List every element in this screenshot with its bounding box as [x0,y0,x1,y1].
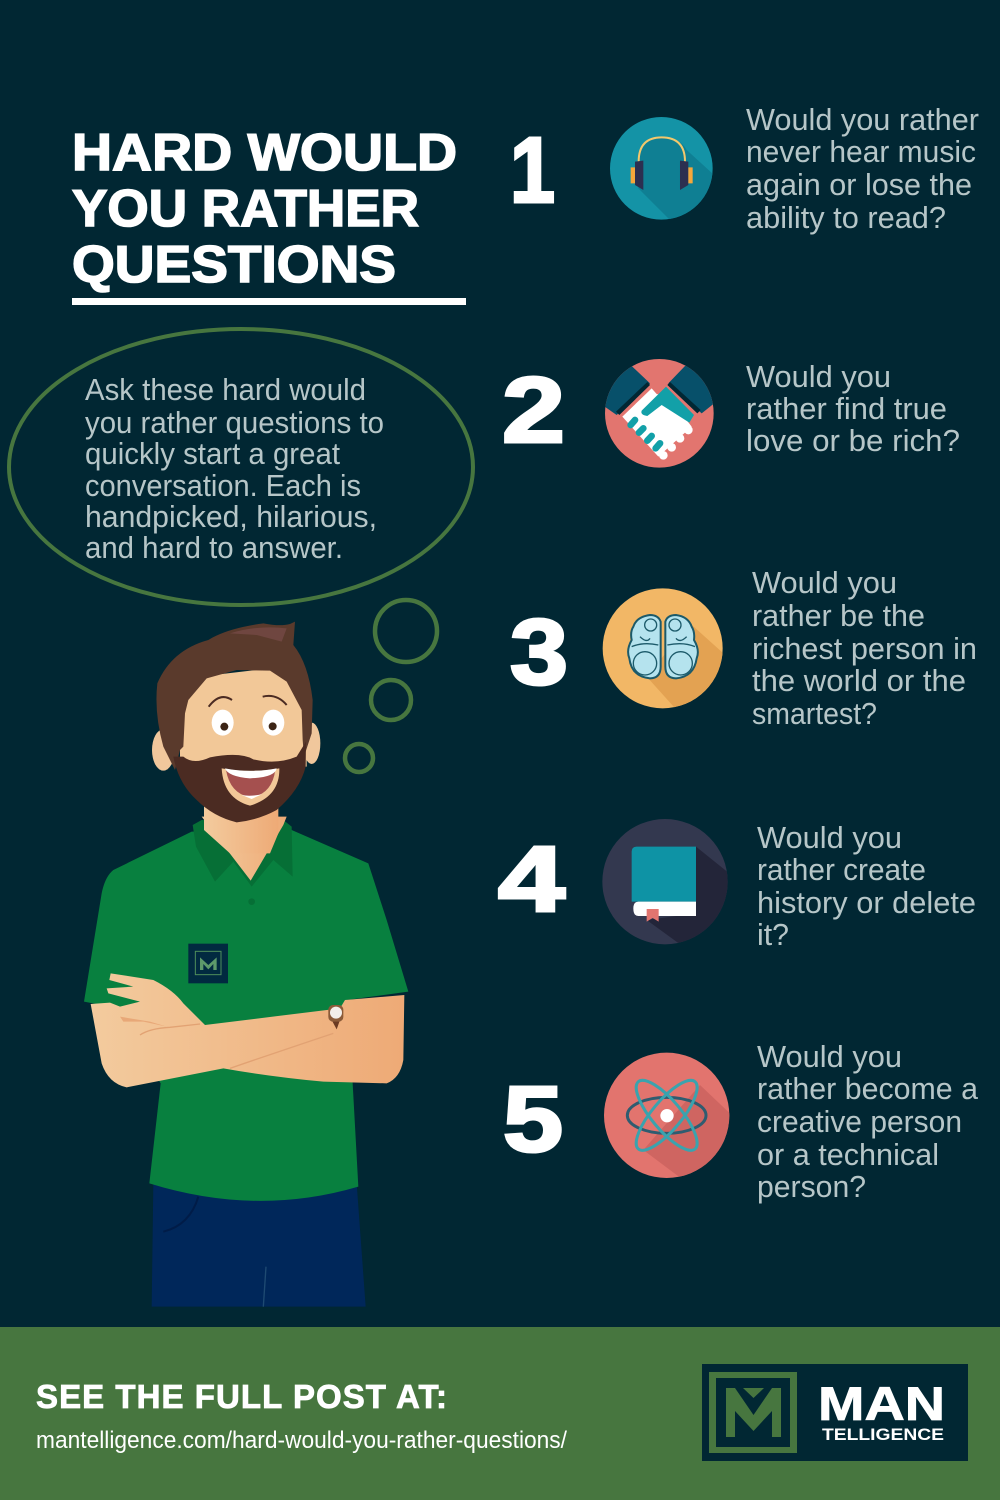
question 5: Would you [757,1039,902,1074]
trousers [152,1183,366,1307]
arms [91,973,404,1087]
icon: book [602,819,733,947]
question 1: ability to read? [746,200,946,235]
question 4: it? [757,917,789,952]
speech bubble: intro: and hard to answer. [85,530,343,565]
question 5: creative person [757,1104,962,1139]
question 5: rather become a [757,1071,979,1106]
title: QUESTIONS [72,236,396,294]
eyes [212,710,234,736]
footer heading: SEE THE FULL POST AT: [36,1378,447,1415]
question 1 [746,102,979,235]
question 2: Would you [746,359,891,394]
question 3: smartest? [752,696,877,731]
logo: MAN [818,1377,945,1430]
watch [328,1005,343,1029]
hair [156,622,313,770]
number 4: 4 [498,827,565,931]
icon: headphones [610,117,713,220]
question 4: history or delete [757,885,976,920]
question 3: rather be the [752,598,925,633]
question 3: Would you [752,565,897,600]
beard [173,742,306,822]
shirt [84,817,408,1201]
icon: atom [604,1053,733,1180]
question 5: or a technical [757,1137,939,1172]
footer banner [0,1327,1000,1500]
speech bubble: intro: handpicked, hilarious, [85,499,377,534]
speech bubble: intro: conversation. Each is [85,468,361,503]
speech bubble: intro: quickly start a great [85,436,340,471]
question 1: again or lose the [746,167,972,202]
question 2: rather find true [746,391,947,426]
title: HARD WOULD [72,124,457,182]
neck [204,807,278,853]
title: YOU RATHER [72,180,419,238]
question 3 [752,565,977,731]
icon: brain [603,588,723,710]
footer url: mantelligence.com/hard-would-you-rather-questions/ [36,1427,567,1454]
number 3: 3 [510,600,568,704]
head [152,622,320,822]
icon: handshake [600,359,718,468]
logo: TELLIGENCE [822,1425,944,1444]
question 5 [757,1039,979,1204]
question 1: never hear music [746,134,976,169]
question 5: person? [757,1169,866,1204]
question 3: richest person in [752,631,977,666]
thought bubbles [345,600,437,772]
question 3: the world or the [752,663,966,698]
mouth [222,768,279,806]
question 1: Would you rather [746,102,979,137]
number 1: 1 [510,118,555,222]
number 5: 5 [503,1067,563,1171]
question 4: Would you [757,820,902,855]
eyebrows [209,696,287,707]
number 2: 2 [502,358,565,462]
question 2: love or be rich? [746,423,960,458]
question 2 [746,359,960,458]
question 4 [757,820,976,952]
character: man with crossed arms [84,622,408,1307]
speech bubble: intro: you rather questions to [85,405,384,440]
title [72,124,466,305]
speech bubble: intro: Ask these hard would [85,372,366,407]
question 4: rather create [757,852,926,887]
speech bubble: intro [9,329,473,605]
logo [702,1364,968,1461]
